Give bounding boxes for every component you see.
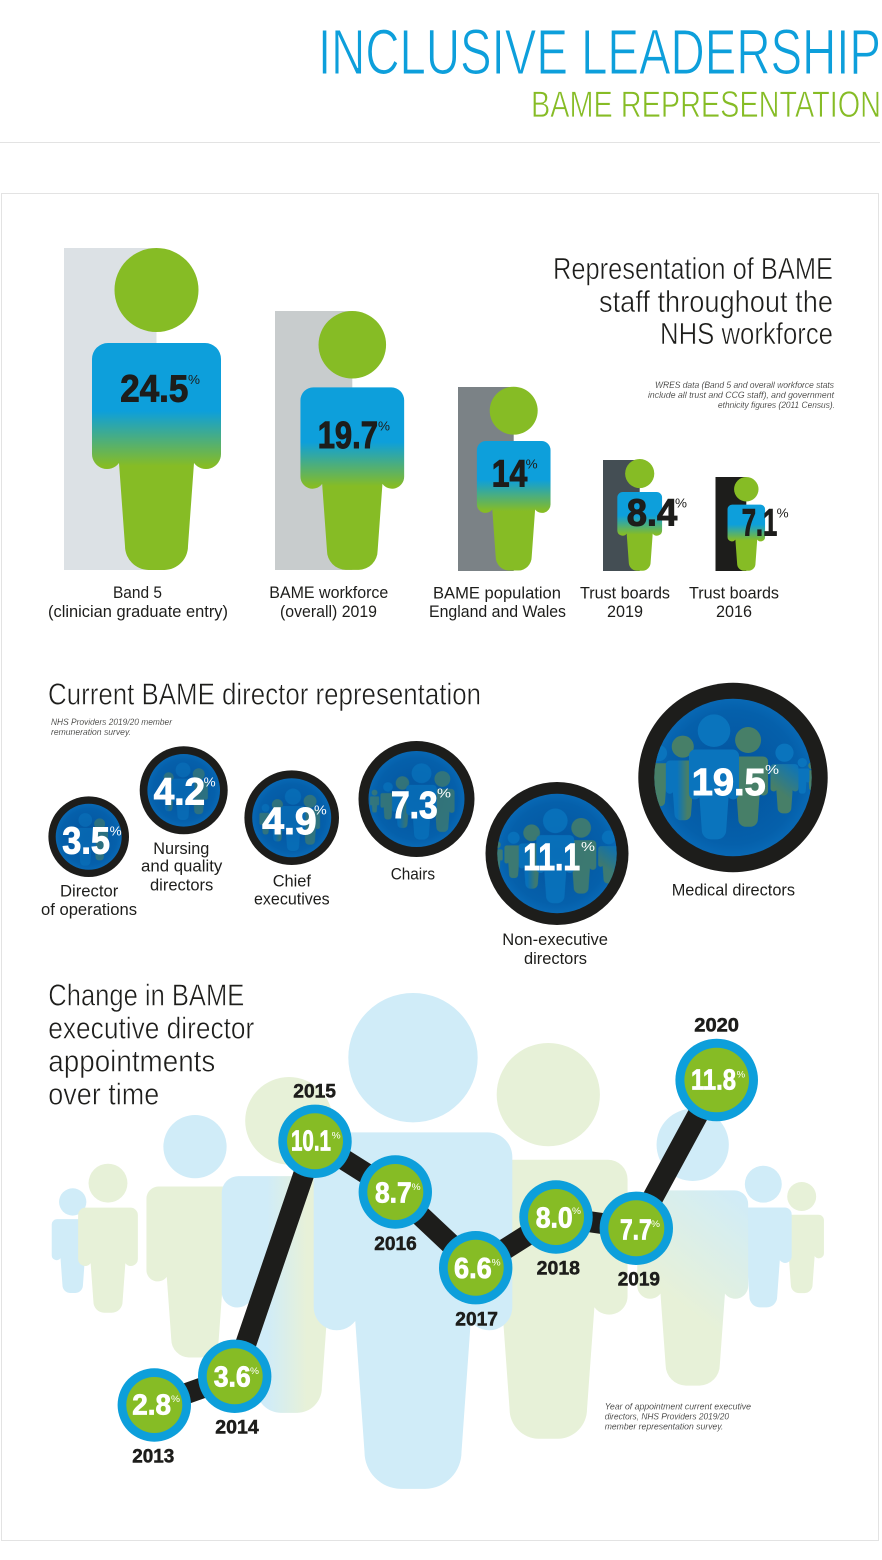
figure: Band 5 24.5%: Band 5	[113, 583, 162, 602]
source note: WRES data: WRES data (Band 5 and overall workforce stats	[655, 380, 834, 391]
figure: BAME population 14%: 14	[492, 454, 527, 496]
point: 2018 8.0%	[519, 1180, 593, 1280]
figure: Trust boards 2019 8.4%: %	[675, 497, 687, 511]
figure: BAME population 14%: %	[526, 458, 538, 472]
point: 2013 2.8%: 2.8	[132, 1389, 171, 1421]
badge: nursing and quality directors 4.2%: directors	[150, 875, 213, 894]
badge: nursing and quality directors 4.2%: Nursing	[153, 839, 209, 858]
background crowd illustration	[52, 993, 824, 1489]
badge: nursing and quality directors 4.2%: and quality	[141, 857, 223, 876]
figure: Trust boards 2016 7.1%: 7.1	[742, 503, 777, 545]
figure: Trust boards 2019 8.4%: Trust boards	[580, 584, 670, 602]
point: 2020 11.8%	[675, 1016, 758, 1121]
badge: non-executive directors 11.1%: directors	[524, 949, 587, 968]
source note: remuneration survey: NHS Providers 2019/20 member	[51, 717, 173, 728]
figure: BAME workforce 19.7%: (overall) 2019	[280, 602, 377, 621]
source note: WRES data: ethnicity figures (2011 Census).	[718, 400, 835, 411]
source note: year of appointment: Year of appointment current executive	[605, 1401, 751, 1412]
badge: nursing and quality directors 4.2%	[140, 746, 228, 894]
badge: non-executive directors 11.1%: Non-executive	[502, 930, 608, 949]
badge: chief executives 4.9%: 4.9	[262, 801, 317, 843]
point: 2015 10.1%	[278, 1081, 352, 1178]
heading: change in executive director appointments	[48, 978, 254, 1111]
point: 2019 7.7%: %	[651, 1219, 661, 1230]
badge: non-executive directors 11.1%: %	[581, 840, 595, 854]
figure: Trust boards 2016 7.1%: %	[777, 507, 789, 521]
figure: Band 5 24.5%	[48, 248, 228, 621]
figure: Trust boards 2019 8.4%	[580, 459, 687, 621]
point: 2017 6.6%: 6.6	[454, 1253, 492, 1285]
point: 2013 2.8%: 2013	[132, 1447, 174, 1468]
point: 2016 8.7%	[359, 1155, 432, 1255]
badge: director of operations 3.5%: Director	[60, 882, 119, 901]
point: 2015 10.1%: 2015	[293, 1081, 336, 1102]
point: 2014 3.6%: 2014	[215, 1417, 259, 1438]
source note: year of appointment: directors, NHS Providers 2019/20	[605, 1412, 730, 1423]
badge: chairs 7.3%: 7.3	[391, 785, 438, 827]
point: 2016 8.7%: 8.7	[375, 1177, 412, 1209]
heading: change in executive director appointments: executive director	[48, 1012, 254, 1046]
source note: WRES data	[648, 380, 835, 411]
badge: non-executive directors 11.1%	[486, 782, 628, 968]
source note: remuneration survey: remuneration survey.	[51, 727, 131, 738]
point: 2017 6.6%	[439, 1231, 512, 1331]
heading: representation of BAME staff: Representation of BAME	[553, 252, 833, 286]
figure: BAME population 14%	[429, 387, 566, 621]
badge: director of operations 3.5%: of operations	[41, 900, 137, 919]
point: 2015 10.1%: %	[332, 1130, 341, 1141]
point: 2016 8.7%: 2016	[374, 1234, 417, 1255]
figure: Trust boards 2019 8.4%: 8.4	[627, 493, 677, 535]
point: 2014 3.6%: 3.6	[214, 1361, 251, 1393]
figure: Trust boards 2016 7.1%: 2016	[716, 602, 752, 621]
point: 2014 3.6%	[198, 1340, 271, 1438]
point: 2018 8.0%: 2018	[537, 1259, 580, 1280]
badge: chief executives 4.9%	[244, 770, 339, 909]
figure: BAME population 14%: BAME population	[433, 584, 561, 602]
badge: chairs 7.3%: %	[437, 787, 451, 801]
point: 2017 6.6%: 2017	[455, 1310, 498, 1331]
point: 2013 2.8%	[118, 1368, 191, 1468]
heading: current BAME director representation: Current BAME director representation	[48, 677, 481, 711]
heading: change in executive director appointments: Change in BAME	[48, 978, 244, 1012]
badge: chief executives 4.9%: %	[314, 803, 327, 817]
figure: Trust boards 2016 7.1%	[689, 477, 789, 621]
point: 2020 11.8%: %	[737, 1069, 746, 1080]
figure: Trust boards 2016 7.1%: Trust boards	[689, 584, 779, 602]
panel: workforce representation	[48, 248, 835, 621]
panel: current director representation	[41, 677, 828, 968]
heading: representation of BAME staff: staff throughout the	[599, 285, 833, 319]
heading: representation of BAME staff: NHS workforce	[660, 317, 833, 351]
figure: BAME workforce 19.7%: 19.7	[318, 415, 378, 457]
figure: BAME workforce 19.7%	[269, 311, 404, 621]
badge: nursing and quality directors 4.2%: %	[204, 776, 216, 790]
badge: medical directors 19.5%	[623, 683, 828, 900]
point: 2016 8.7%: %	[412, 1182, 421, 1193]
point: 2017 6.6%: %	[492, 1257, 501, 1268]
figure: BAME population 14%: England and Wales	[429, 602, 566, 621]
badge: nursing and quality directors 4.2%: 4.2	[154, 771, 205, 813]
heading: change in executive director appointments: over time	[48, 1077, 159, 1111]
point: 2019 7.7%: 2019	[618, 1269, 660, 1290]
badge: chairs 7.3%	[358, 741, 474, 883]
point: 2014 3.6%: %	[250, 1366, 260, 1377]
badge: chief executives 4.9%: executives	[254, 890, 330, 909]
badge: director of operations 3.5%: 3.5	[62, 820, 110, 862]
point: 2020 11.8%: 11.8	[691, 1064, 736, 1096]
badge: non-executive directors 11.1%: 11.1	[523, 837, 580, 879]
point: 2015 10.1%: 10.1	[291, 1126, 331, 1158]
point: 2020 11.8%: 2020	[694, 1016, 739, 1037]
source note: year of appointment	[605, 1401, 751, 1432]
figure: BAME workforce 19.7%: %	[378, 420, 390, 434]
source note: year of appointment: member representation survey.	[605, 1421, 723, 1432]
badge: medical directors 19.5%: 19.5	[692, 762, 766, 804]
source note: remuneration survey	[51, 717, 173, 738]
line chart: appointments 2013 to 2020	[118, 1016, 758, 1468]
badge: medical directors 19.5%: %	[765, 763, 779, 777]
heading: representation of BAME staff	[553, 252, 833, 351]
figure: Band 5 24.5%: (clinician graduate entry)	[48, 602, 228, 621]
point: 2019 7.7%: 7.7	[620, 1214, 652, 1246]
badge: director of operations 3.5%	[41, 796, 137, 919]
figure: Trust boards 2019 8.4%: 2019	[607, 602, 643, 621]
point: 2018 8.0%: 8.0	[536, 1202, 573, 1234]
figure: BAME workforce 19.7%: BAME workforce	[269, 583, 388, 602]
heading: change in executive director appointments: appointments	[48, 1044, 215, 1078]
point: 2019 7.7%	[600, 1192, 673, 1290]
figure: Band 5 24.5%: 24.5	[120, 369, 188, 411]
trend line	[154, 1080, 717, 1405]
panel: change over time	[48, 978, 824, 1489]
figure: Band 5 24.5%: %	[188, 373, 200, 387]
badge: medical directors 19.5%: Medical directors	[672, 881, 795, 900]
source note: WRES data: include all trust and CCG staff), and government	[648, 390, 834, 401]
badge: chairs 7.3%: Chairs	[391, 864, 435, 883]
point: 2018 8.0%: %	[572, 1206, 582, 1217]
badge: director of operations 3.5%: %	[110, 825, 122, 839]
badge: chief executives 4.9%: Chief	[273, 872, 311, 891]
point: 2013 2.8%: %	[171, 1394, 181, 1405]
